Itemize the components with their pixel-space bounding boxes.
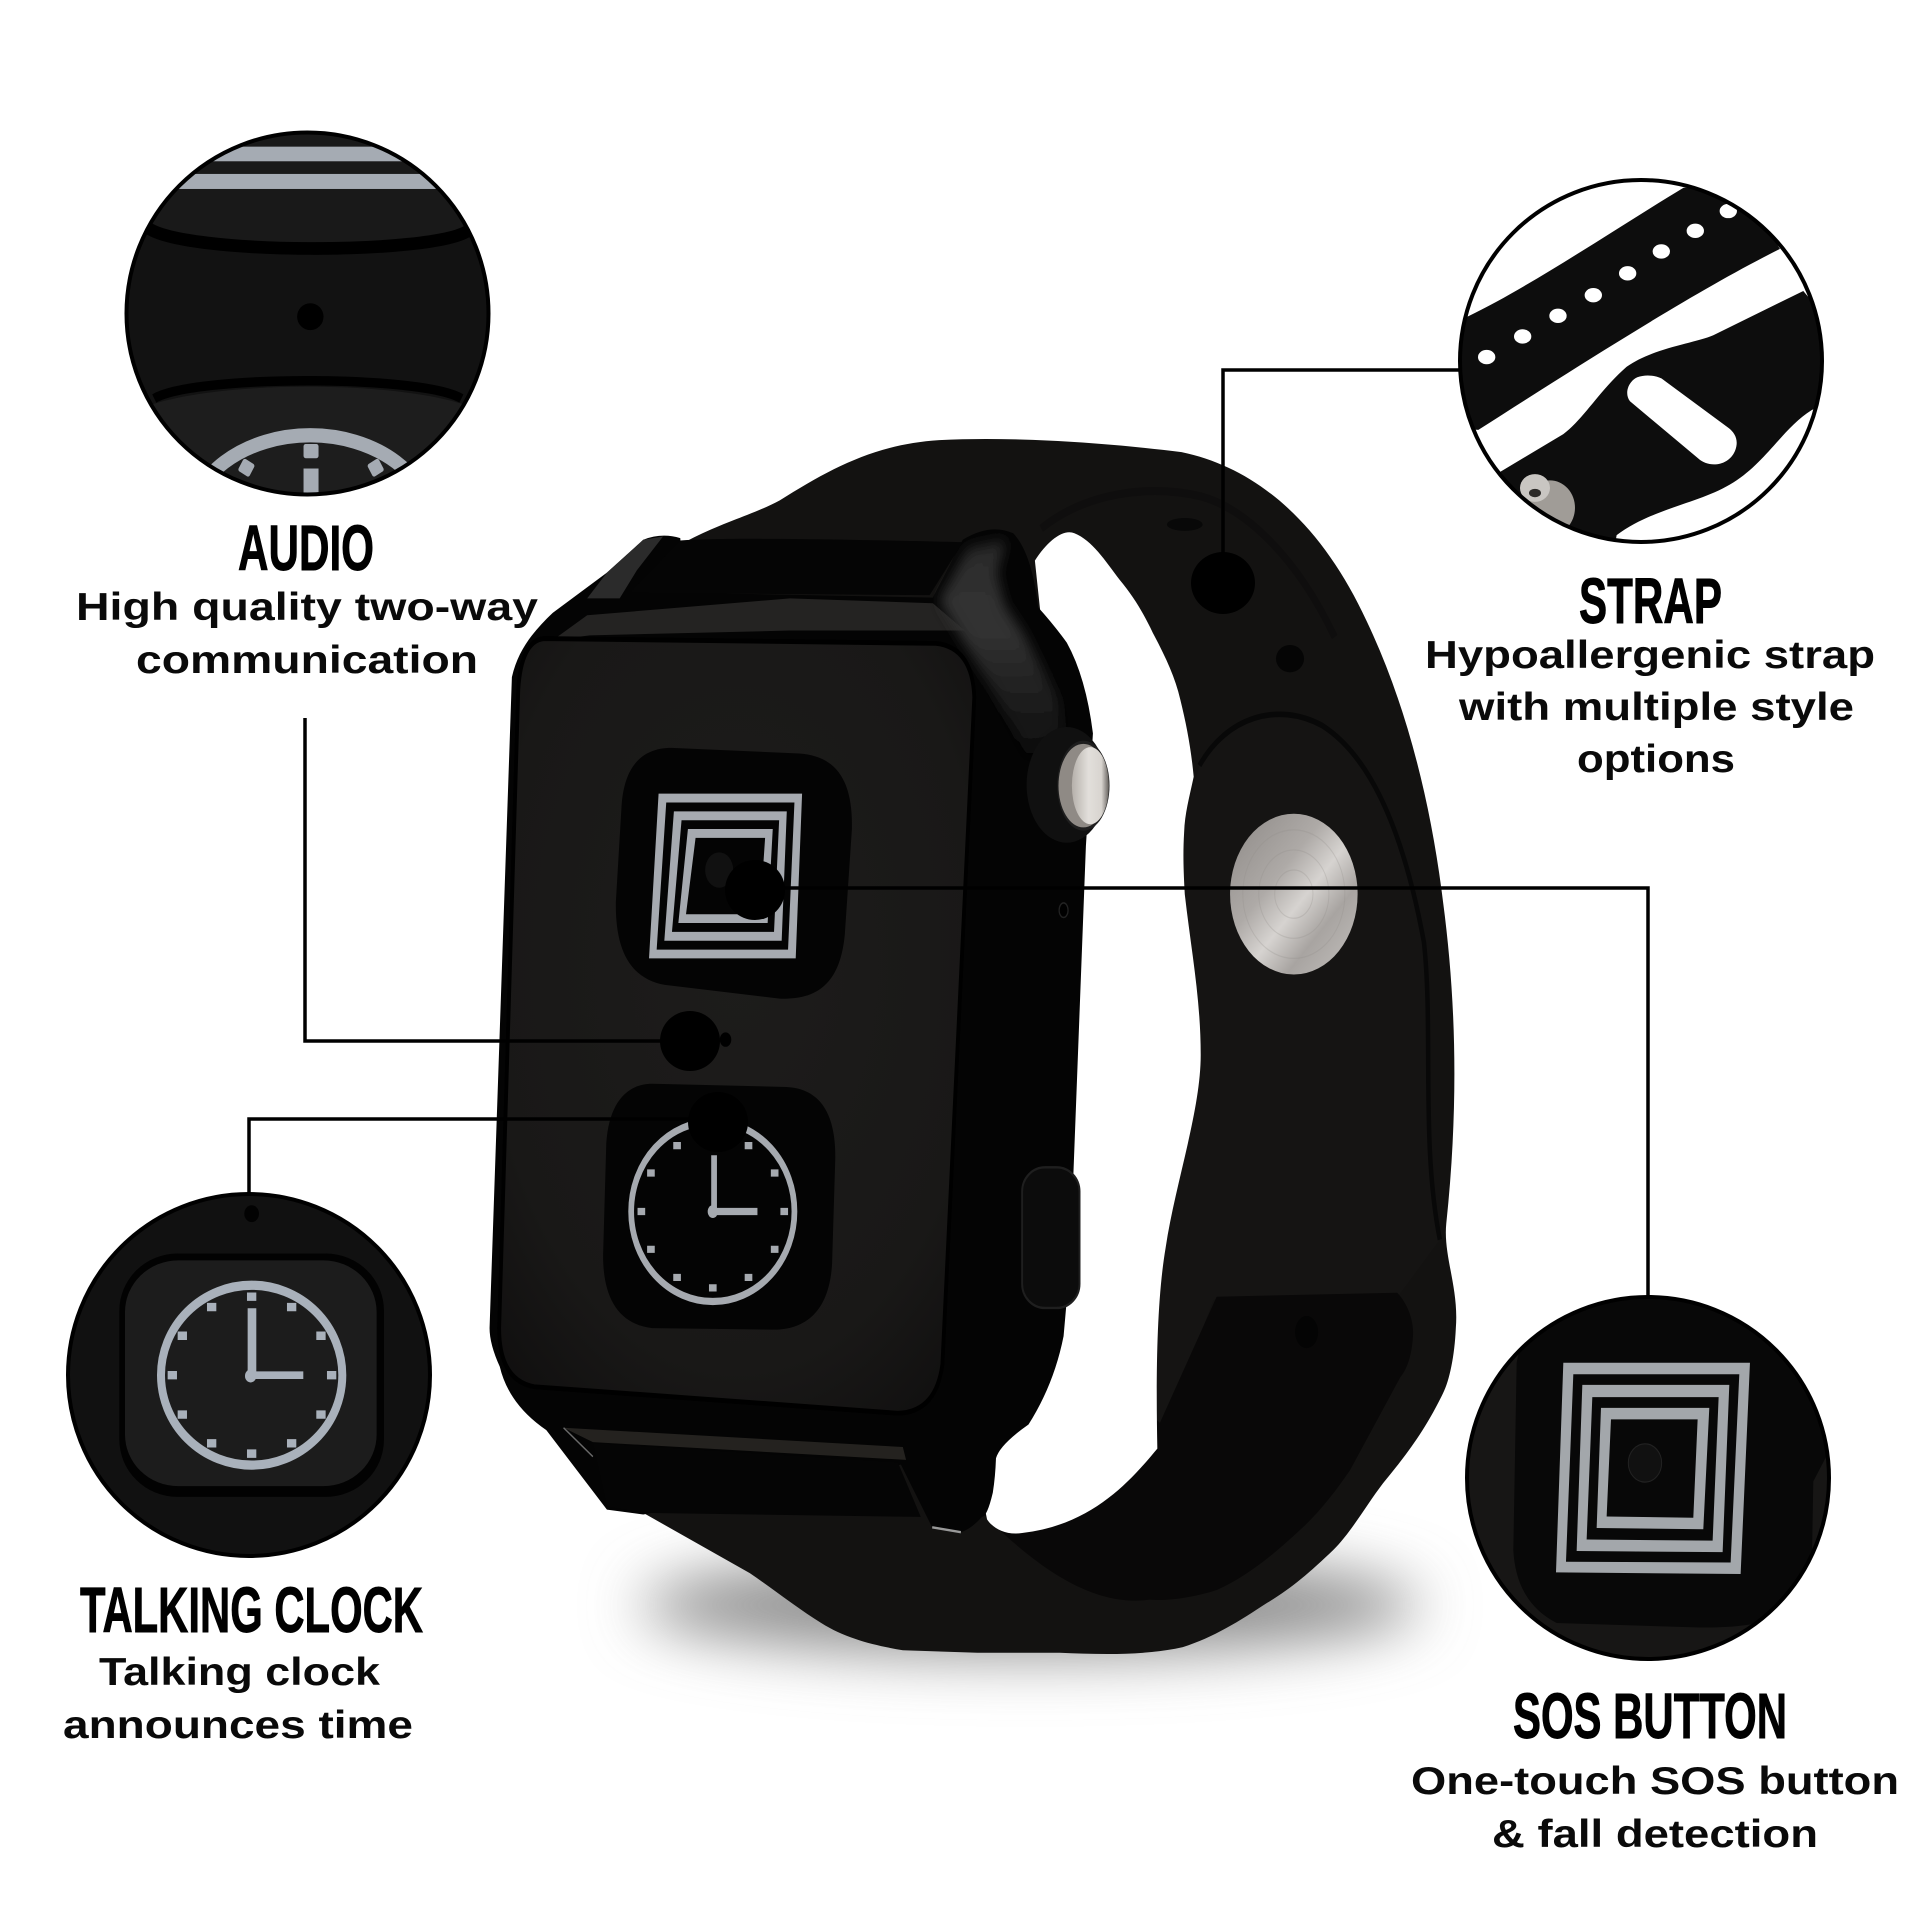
talking clock button on watch [603,1084,835,1330]
case highlights [553,537,1064,1532]
leader line: talking clock [249,1119,717,1193]
microphone hole [720,1032,731,1047]
callout dot: SOS button [725,860,785,920]
text: strap description: with multiple style [1458,686,1854,729]
text: SOS button description: One-touch SOS button [1411,1760,1899,1803]
heading: strap: STRAP [1579,565,1722,637]
text: SOS button description [1411,1760,1899,1856]
text: talking clock description: announces time [63,1704,413,1747]
text: talking clock description: Talking clock [99,1651,380,1694]
callout dot: audio [660,1011,720,1071]
text: strap description [1425,634,1875,781]
text: strap description: options [1577,738,1735,781]
heading: SOS button: SOS BUTTON [1513,1680,1787,1752]
panel: audio detail circle [124,130,490,496]
heading: talking clock: TALKING CLOCK [80,1574,423,1646]
side speaker hole [1059,903,1068,917]
panel: talking clock detail circle [60,1190,440,1565]
watch case [490,529,1093,1532]
strap [627,439,1456,1654]
heading: audio: AUDIO [238,512,374,584]
ground shadow [640,1555,1420,1655]
text: audio description: communication [136,639,478,682]
leader line: audio [305,718,693,1041]
callout dot: strap [1191,552,1255,614]
text: talking clock description [63,1651,413,1747]
text: SOS button description: & fall detection [1492,1813,1818,1856]
panel: strap detail circle [1450,175,1833,554]
silver clasp button [1230,814,1358,974]
text: strap description: Hypoallergenic strap [1425,634,1875,677]
strap band top and bottom [593,539,963,1517]
text: audio description: High quality two-way [76,586,538,629]
watch face [499,639,974,1413]
leader line: strap [1223,370,1459,583]
side button [1022,1167,1080,1308]
leader line: SOS button [755,888,1648,1297]
callout dot: talking clock [688,1092,748,1152]
crown [1027,727,1110,843]
text: audio description [76,586,538,682]
panel: SOS button detail circle [1460,1290,1840,1665]
smartwatch [490,439,1456,1654]
SOS button on watch [616,748,852,999]
